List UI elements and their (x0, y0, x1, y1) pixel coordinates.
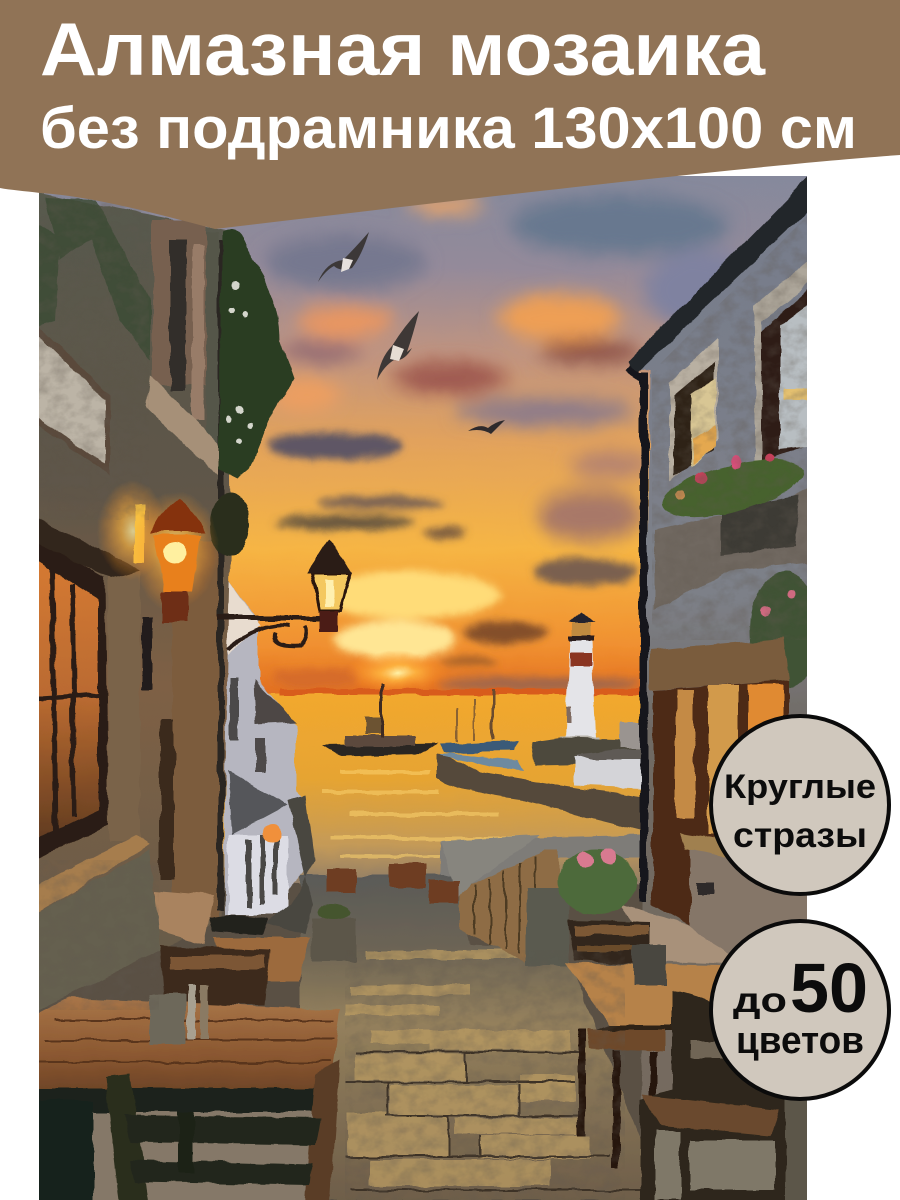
boats (322, 683, 520, 756)
stairs, railing and planter (312, 835, 637, 966)
badge: up to 50 colours (711, 921, 889, 1099)
title line 2: без подрамника 130х100 см (40, 96, 857, 161)
left building (20, 190, 230, 1015)
badge: up to 50 colours: 50 (790, 949, 868, 1027)
shop front (622, 636, 807, 964)
flower box (662, 454, 807, 688)
left window (39, 518, 214, 1010)
distant left houses (225, 575, 315, 935)
wall glow patch (99, 482, 160, 578)
right building (626, 176, 807, 1100)
sea (222, 688, 641, 884)
left tables and chairs (25, 915, 340, 1200)
harbour pier and buildings (437, 723, 640, 885)
seagulls (318, 232, 505, 434)
sky with clouds (20, 160, 820, 700)
right upper windows (668, 262, 807, 482)
badge: round rhinestones: Круглые (724, 768, 876, 806)
badge: round rhinestones (711, 716, 889, 894)
ivy on left building (210, 230, 294, 557)
stone wall texture (39, 190, 807, 1200)
street (300, 875, 650, 1200)
badge: up to 50 colours: цветов (736, 1020, 864, 1062)
title banner (0, 0, 900, 229)
badge: up to 50 colours: до (733, 981, 787, 1020)
lighthouse (560, 611, 600, 742)
street lamp and bracket (218, 538, 352, 650)
right table and chairs (565, 920, 825, 1200)
badge: round rhinestones: стразы (733, 816, 867, 855)
painting (20, 155, 830, 1200)
title line 1: Алмазная мозаика (40, 7, 766, 91)
wall lantern (131, 490, 219, 690)
distant benches (327, 864, 459, 904)
